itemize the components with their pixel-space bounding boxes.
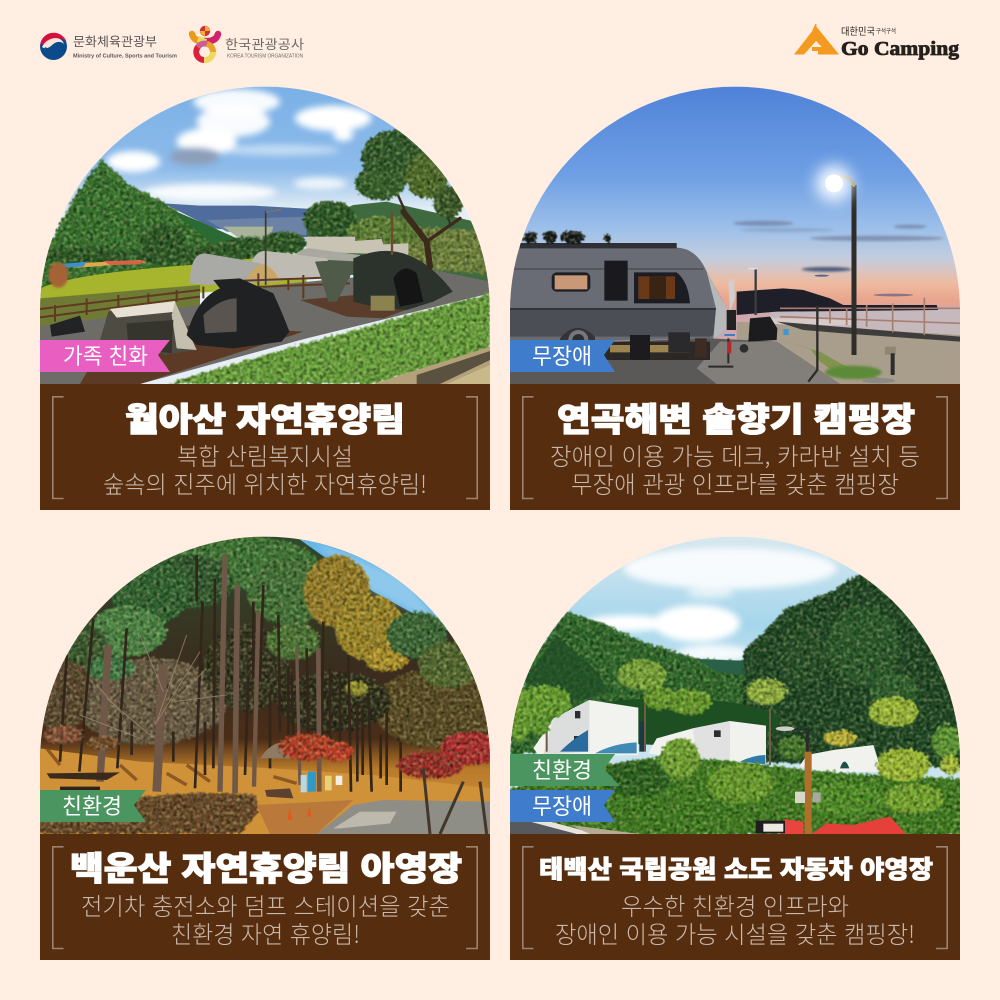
description: 우수한 친환경 인프라와 <box>621 887 849 922</box>
photo: mountain campsite with tents <box>37 85 490 385</box>
main mountain <box>40 159 237 298</box>
description: 장애인 이용 가능 데크, 카라반 설치 등 <box>550 437 920 472</box>
panel: 월아산 자연휴양림 <box>37 85 490 510</box>
foreground shrubs <box>510 738 977 835</box>
road <box>510 822 593 834</box>
hedge <box>40 793 258 834</box>
ribbon: 가족 친화: 가족 친화 <box>63 339 148 371</box>
ground gravel <box>40 270 490 384</box>
logo: Korea Tourism Organization: KOREA TOURISM ORGANIZATION <box>227 54 303 60</box>
bracket frame <box>53 397 477 498</box>
grass bank <box>167 293 490 384</box>
brown caption box <box>40 834 490 960</box>
bracket frame <box>523 847 947 948</box>
tree trunks <box>547 695 770 765</box>
small dark tent <box>187 278 289 348</box>
panel: 백운산 자연휴양림 아영장 <box>30 535 500 960</box>
tree line <box>37 201 420 265</box>
panel: 연곡해변 솔향기 캠핑장 <box>510 85 960 510</box>
logo: Go Camping: Go Camping <box>841 38 959 60</box>
photo: white caravans in green forest <box>508 535 977 835</box>
road <box>257 800 353 834</box>
trees above caravan <box>523 230 611 244</box>
right caravan <box>799 745 882 772</box>
caravan <box>510 243 725 343</box>
ribbon: 가족 친화 <box>40 339 170 372</box>
logo: Korea Tourism Organization: 한국관광공사 <box>225 37 304 52</box>
fence <box>40 273 350 322</box>
logo: Go Camping <box>795 24 959 60</box>
distant mountains <box>163 203 317 238</box>
under-caravan <box>600 342 710 360</box>
ribbon: 무장애: 무장애 <box>532 339 592 371</box>
cream tent <box>100 302 197 354</box>
small lamp <box>754 269 757 315</box>
description <box>103 437 427 500</box>
photo: caravan at sunset beach <box>510 85 960 385</box>
heading: 백운산 자연휴양림 아영장 <box>70 842 462 890</box>
young trees <box>508 660 962 760</box>
big caravan <box>533 700 638 757</box>
field <box>40 253 307 315</box>
heading: 연곡해변 솔향기 캠핑장 <box>557 393 915 441</box>
cones <box>287 808 292 820</box>
ribbon: 친환경 <box>40 789 146 822</box>
photo: autumn pine forest <box>30 535 500 835</box>
logo: Ministry of Culture, Sports and Tourism: Ministry of Culture, Sports and Tourism <box>73 54 177 60</box>
ribbon: 무장애 <box>510 339 615 372</box>
bare branches <box>80 635 227 738</box>
ribbon: 친환경 <box>510 753 620 786</box>
large dark tent <box>300 292 453 318</box>
description: 전기차 충전소와 덤프 스테이션을 갖춘 <box>81 887 450 922</box>
big tree <box>393 185 460 267</box>
glamping tents <box>307 237 408 255</box>
crepe myrtle trunks <box>423 768 487 834</box>
ribbon: 무장애: 무장애 <box>532 789 592 821</box>
shelter and maple <box>260 742 293 758</box>
beach and ground <box>737 322 960 384</box>
logo: Go Camping: 구석구석 <box>876 26 896 35</box>
brown caption box <box>510 834 960 960</box>
mountain <box>510 611 770 755</box>
heading: 태백산 국립공원 소도 자동차 야영장 <box>539 850 933 886</box>
ground <box>40 748 490 834</box>
open door and person <box>728 278 735 312</box>
description <box>550 437 920 500</box>
bracket frame <box>523 397 947 498</box>
logo: Ministry of Culture, Sports and Tourism <box>40 33 177 60</box>
ribbon: 친환경: 친환경 <box>62 789 122 821</box>
panel: 태백산 국립공원 소도 자동차 야영장 <box>508 535 977 960</box>
dark forest <box>743 573 977 768</box>
description: 복합 산림복지시설 <box>177 437 353 472</box>
signs and bench <box>301 775 307 792</box>
right hillside <box>307 202 490 285</box>
red tents and plate <box>782 819 803 834</box>
logo: Korea Tourism Organization <box>192 26 304 60</box>
ribbon: 무장애 <box>510 789 615 822</box>
bracket frame <box>53 847 477 948</box>
canopy <box>60 537 478 696</box>
description: 장애인 이용 가능 시설을 갖춘 캠핑장! <box>555 915 915 950</box>
brown caption box <box>510 384 960 510</box>
description: 친환경 자연 휴양림! <box>171 915 360 950</box>
sea and distant headland <box>770 309 960 335</box>
description: 무장애 관광 인프라를 갖춘 캠핑장 <box>571 465 899 500</box>
description <box>555 887 915 950</box>
description <box>81 887 450 950</box>
logo: Ministry of Culture, Sports and Tourism: 문화체육관광부 <box>73 35 157 49</box>
ribbon: 친환경: 친환경 <box>532 753 592 785</box>
post <box>808 306 817 382</box>
fence on beach <box>780 298 960 335</box>
deck <box>80 325 303 384</box>
description: 숲속의 진주에 위치한 자연휴양림! <box>103 465 427 500</box>
bare tree mass <box>30 625 500 748</box>
logo: Go Camping: 대한민국 <box>841 26 875 38</box>
lamp post <box>803 732 812 834</box>
heading: 월아산 자연휴양림 <box>125 393 405 441</box>
scooter and gear <box>708 338 733 367</box>
big street lamp <box>852 185 856 355</box>
trunks <box>60 555 401 792</box>
mid caravan <box>648 721 766 765</box>
brown caption box <box>40 384 490 510</box>
